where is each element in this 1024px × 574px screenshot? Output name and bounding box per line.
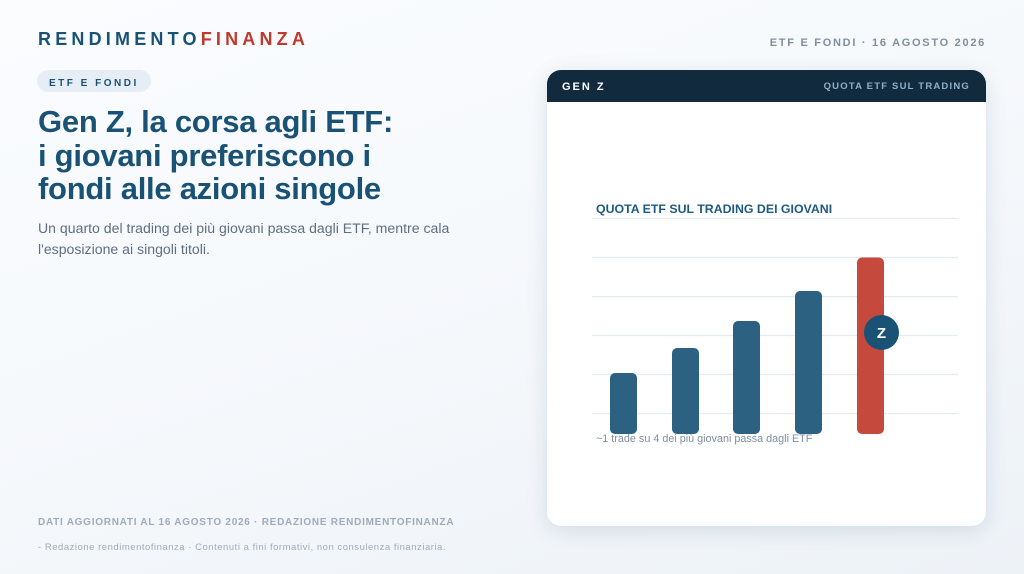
bars	[610, 291, 822, 434]
badge: Z	[864, 315, 899, 350]
highlighted bar: Gen Z	[857, 258, 884, 434]
badge: Z: Z	[877, 325, 886, 342]
card header bar	[547, 70, 986, 102]
logo: RENDIMENTOFINANZA	[38, 29, 309, 49]
card header right label: QUOTA ETF SUL TRADING	[824, 81, 970, 92]
chart	[592, 202, 958, 445]
title: Gen Z, la corsa agli ETF:	[38, 104, 393, 139]
subtitle: l'esposizione ai singoli titoli.	[38, 240, 210, 256]
title: fondi alle azioni singole	[38, 171, 381, 206]
chart note: ~1 trade su 4 dei più giovani passa dagli ETF	[596, 433, 813, 445]
category pill	[37, 70, 151, 92]
title: i giovani preferiscono i	[38, 138, 371, 173]
chart title: QUOTA ETF SUL TRADING DEI GIOVANI	[596, 202, 832, 216]
category pill: ETF E FONDI	[49, 78, 139, 89]
subtitle	[38, 220, 450, 257]
title	[38, 104, 393, 206]
card header label: GEN Z	[562, 81, 606, 93]
subtitle: Un quarto del trading dei più giovani passa dagli ETF, mentre cala	[38, 220, 449, 236]
panel: chart card	[547, 70, 986, 526]
footer disclaimer: - Redazione rendimentofinanza · Contenuti a fini formativi, non consulenza finanziaria.	[38, 542, 446, 553]
header meta: category and date: ETF E FONDI · 16 AGOSTO 2026	[770, 37, 986, 49]
footer update line: DATI AGGIORNATI AL 16 AGOSTO 2026 · REDAZIONE RENDIMENTOFINANZA	[38, 517, 454, 528]
